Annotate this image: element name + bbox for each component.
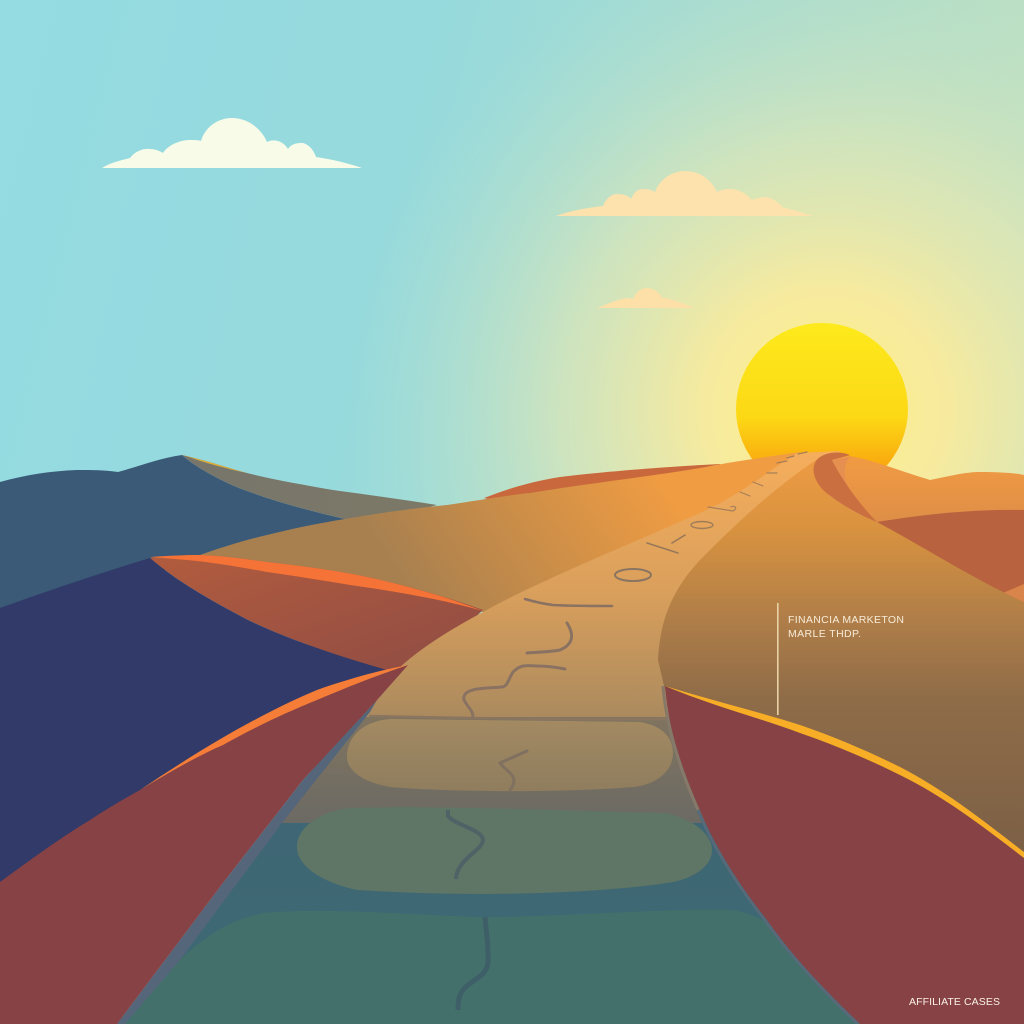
road edge strip: right upper bbox=[663, 686, 698, 810]
footer label: AFFILIATE CASES bbox=[909, 996, 1000, 1008]
callout text: MARLE THDP. bbox=[788, 628, 861, 640]
navy dune bbox=[0, 558, 387, 900]
road band: middle pill bbox=[297, 807, 712, 894]
sun bbox=[736, 323, 908, 495]
far right terracotta slope bbox=[877, 510, 1024, 593]
callout text: FINANCIA MARKETON bbox=[788, 614, 904, 626]
road markings bbox=[370, 452, 807, 1010]
winding road bbox=[117, 451, 860, 1024]
cloud: small bbox=[597, 288, 695, 308]
road band: upper pill bbox=[347, 719, 673, 791]
road band: lower pill bbox=[123, 910, 860, 1024]
right dune bbox=[658, 456, 1024, 860]
dune shadow ridge bbox=[484, 464, 720, 510]
cloud: upper left bbox=[102, 118, 362, 168]
callout text bbox=[788, 614, 904, 640]
red dune: right bbox=[665, 686, 1024, 1024]
road edge strip: right lower bbox=[698, 810, 858, 1024]
road edge strip: left bbox=[117, 700, 377, 1024]
far right dune bbox=[815, 452, 1024, 610]
terracotta dune bbox=[150, 555, 483, 672]
cloud: upper right bbox=[556, 171, 813, 216]
right dune crest bbox=[814, 453, 877, 522]
central dune bbox=[200, 452, 800, 640]
callout: vertical rule bbox=[777, 603, 779, 715]
grey ridge bbox=[182, 455, 437, 530]
back left mountain bbox=[0, 455, 345, 620]
red dune: left bbox=[0, 665, 408, 1024]
